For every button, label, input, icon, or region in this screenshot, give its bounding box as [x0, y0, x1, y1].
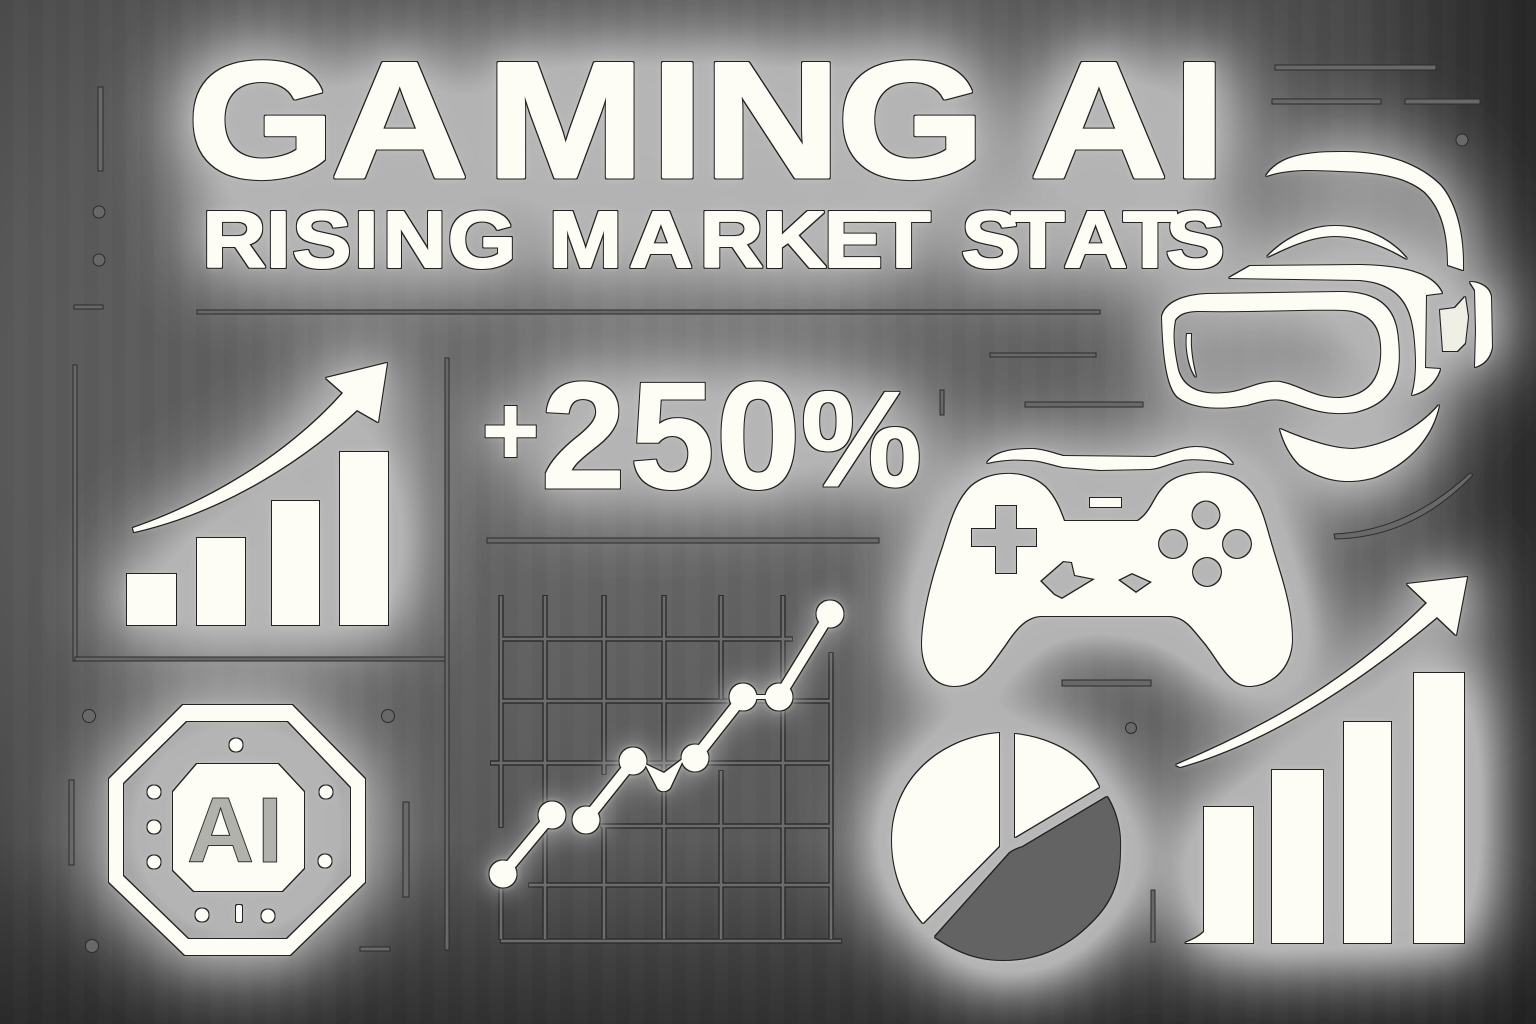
title: GAMING [187, 28, 985, 212]
icon: AI chip octagon [109, 705, 365, 955]
big stat: +250%: + [482, 375, 539, 485]
side block [1440, 297, 1468, 351]
data dip segment [645, 758, 684, 791]
subtitle: STATS [961, 195, 1225, 284]
panel frame lines and decorative marks [69, 65, 1480, 952]
chip pins [148, 738, 332, 922]
line chart grid [490, 595, 842, 941]
arrow: rising left [133, 363, 387, 532]
headband middle [1267, 226, 1407, 259]
bar 2 [1272, 770, 1323, 943]
visor strap [1229, 265, 1442, 395]
bar 3 [272, 501, 319, 625]
lens highlight [1187, 334, 1196, 377]
subtitle: RISING [202, 195, 516, 284]
title: AI [1030, 28, 1226, 212]
side strap [1470, 282, 1492, 367]
data line [503, 614, 830, 874]
icon: pie chart [892, 733, 1120, 960]
pie slice: small [1015, 734, 1099, 837]
controller top band [987, 447, 1233, 470]
icon: game controller [922, 447, 1292, 686]
goggle frame [1162, 292, 1399, 413]
bar 3 [1344, 722, 1391, 943]
pie slice: large [892, 733, 999, 923]
data link [752, 695, 772, 699]
pie slice: dark [935, 797, 1120, 960]
arrow: rising right [1176, 577, 1467, 767]
big stat: +250%: 250 [541, 351, 801, 521]
chip core with AI label [173, 764, 304, 891]
icon: VR headset [1162, 152, 1492, 481]
bar 2 [197, 538, 245, 625]
subtitle: MARKET [549, 195, 930, 284]
bar chart: left with rising arrow [127, 363, 388, 625]
subtitle [202, 195, 1225, 284]
bar 1 [1185, 807, 1253, 943]
line chart: rising data series [490, 600, 844, 888]
data points [490, 600, 844, 888]
bar 4 [340, 452, 388, 625]
bar chart: right with rising arrow [1176, 577, 1467, 943]
chip ring [109, 705, 365, 955]
controller menu button [1090, 498, 1121, 507]
headband top [1266, 152, 1463, 270]
big stat: +250%: % [801, 363, 922, 515]
chip label: AI: AI [187, 778, 283, 882]
bar 4 [1414, 673, 1464, 943]
lower crescent [1280, 405, 1439, 481]
controller body with d-pad and button holes [922, 473, 1292, 686]
bar 1 [127, 574, 176, 625]
